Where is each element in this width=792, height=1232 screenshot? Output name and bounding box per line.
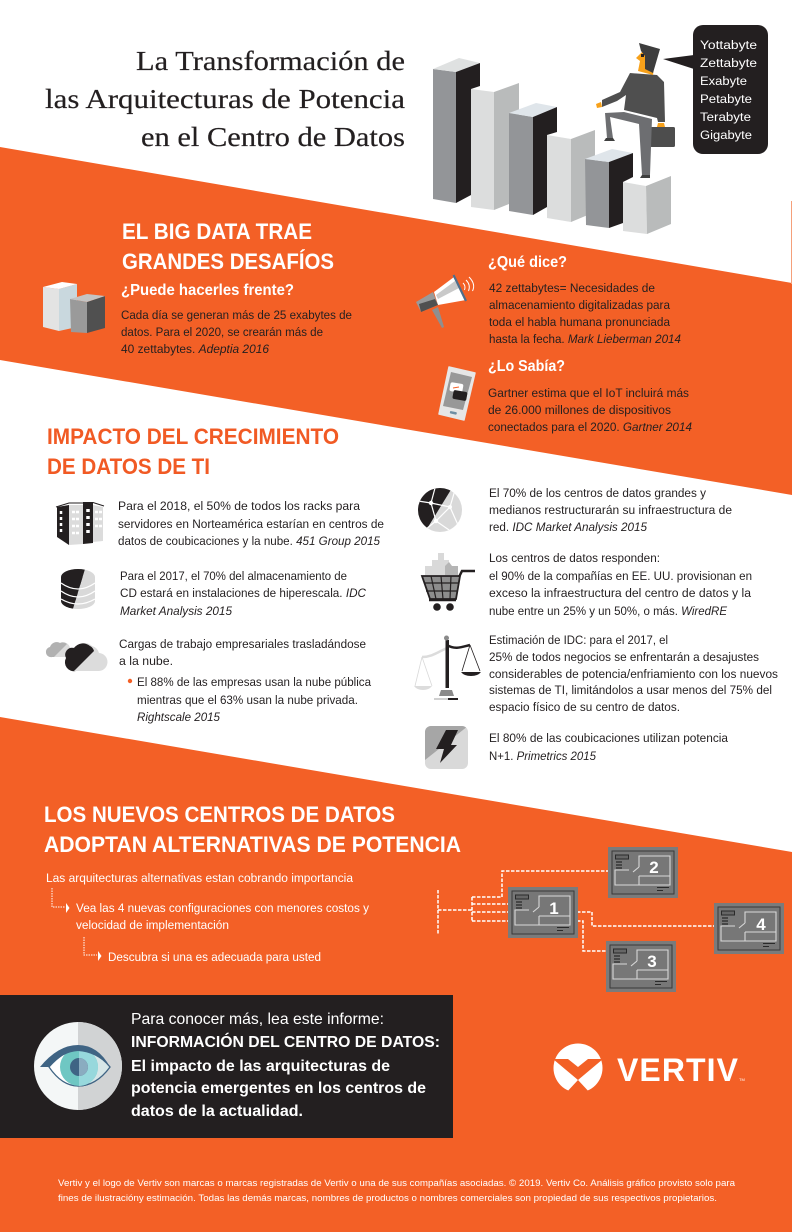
text block: que dice: almacenamiento digitalizadas para [489,298,670,312]
text block: responden: exceso la infraestructura del centro de datos y la [489,586,751,600]
icon: eye [34,1022,122,1110]
text block: almacenamiento: Market Analysis 2015 [120,604,232,618]
text block: potencia n+1: El 80% de las coubicaciones utilizan potencia [489,731,728,745]
text block: responden: Los centros de datos responden: [489,551,660,565]
text block: que dice [488,254,681,346]
speech bubble: data units: Gigabyte [700,128,752,142]
footer legal text: Vertiv y el logo de Vertiv son marcas o marcas registradas de Vertiv o una de sus compañías asociadas. © 2019. Vertiv Co. Análisis gráfico provisto solo para [58,1178,735,1188]
text block: nube: El 88% de las empresas usan la nube pública [137,675,371,689]
text block: puede hacerles frente: ¿Puede hacerles frente? [121,282,294,299]
text block: infraestructura de red: red. IDC Market Analysis 2015 [489,520,647,534]
text block: racks [118,499,384,548]
text block: infraestructura de red: El 70% de los centros de datos grandes y [489,486,707,500]
speech bubble: data units [663,25,768,154]
text block: nube [119,637,371,724]
diagram: floor plan 4: 4 [756,915,766,934]
text block: arquitecturas alternativas: Descubra si una es adecuada para usted [108,950,321,964]
orange edge sliver [791,201,792,284]
text block: lo sabia: conectados para el 2020. Gartner 2014 [488,420,692,434]
text block: almacenamiento [120,569,366,618]
title: las Arquitecturas de Potencia [45,84,405,114]
diagram: floor plan 4 [714,903,784,954]
panel: orange lower section [0,717,792,1232]
text block: potencia n+1 [489,731,728,763]
panel: call to action [0,995,453,1138]
text block: arquitecturas alternativas: velocidad de implementación [76,918,229,932]
text block: estimacion idc: Estimación de IDC: para el 2017, el [489,633,668,647]
illustration: data bars staircase [433,58,671,234]
text block: estimacion idc: sistemas de TI, limitándolos a usar menos del 75% del [489,683,772,697]
text block: informe: Para conocer más, lea este informe: [131,1011,384,1028]
text block: arquitecturas alternativas [46,871,370,964]
heading: impacto [47,424,339,479]
text block: racks: Para el 2018, el 50% de todos los racks para [118,499,360,513]
text block: puede hacerles frente: Cada día se generan más de 25 exabytes de [121,308,352,322]
text block: almacenamiento: Para el 2017, el 70% del almacenamiento de [120,569,347,583]
title: La Transformación de [136,46,405,76]
text block: infraestructura de red: medianos restructurarán su infraestructura de [489,503,732,517]
text block: que dice: ¿Qué dice? [488,254,567,271]
heading: nuevos centros: LOS NUEVOS CENTROS DE DATOS [44,802,395,827]
text block: nube: a la nube. [119,654,173,668]
icon: smartphone [439,367,475,420]
logo: vertiv [553,1044,745,1094]
text block: responden: nube entre un 25% y un 50%, o más. WiredRE [489,604,728,618]
text block: estimacion idc: considerables de potencia/enfriamiento con los nuevos [489,667,778,681]
icon: database [61,569,95,609]
heading: impacto: IMPACTO DEL CRECIMIENTO [47,424,339,449]
text block: puede hacerles frente [121,282,352,356]
diagram: floor plan 1: 1 [549,899,559,918]
text block: arquitecturas alternativas: Vea las 4 nuevas configuraciones con menores costos y [76,901,370,915]
text block: informe: datos de la actualidad. [131,1103,303,1120]
icon: globe [418,488,462,532]
text block: responden [489,551,752,618]
text block: lo sabia: Gartner estima que el IoT incluirá más [488,386,689,400]
speech bubble: data units: Petabyte [700,92,752,106]
text block: responden: el 90% de la compañías en EE. UU. provisionan en [489,569,752,583]
diagram: dashed connections [438,871,714,951]
footer legal text: fines de ilustracióny estimación. Todas las demás marcas, nombres de productos o nombres comerciales son propiedad de sus respectivos propietarios. [58,1193,717,1203]
heading: big data [122,219,334,274]
heading: big data: EL BIG DATA TRAE [122,219,312,244]
text block: racks: servidores en Norteamérica estarían en centros de [118,517,384,531]
icon: shopping cart [422,553,475,611]
icon: megaphone [416,275,474,328]
speech bubble: data units: Exabyte [700,74,747,88]
text block: lo sabia: de 26.000 millones de dispositivos [488,403,671,417]
text block: potencia n+1: N+1. Primetrics 2015 [489,749,596,763]
text block: puede hacerles frente: 40 zettabytes. Adeptia 2016 [121,342,269,356]
text block: que dice: toda el habla humana pronunciada [489,315,670,329]
text block: lo sabia [488,358,692,434]
heading: impacto: DE DATOS DE TI [47,454,210,479]
text block: nube: Rightscale 2015 [137,710,220,724]
logo: vertiv: VERTIV [617,1052,739,1088]
text block: informe: potencia emergentes en los centros de [131,1080,426,1097]
icon: balance scale [414,636,481,700]
logo: vertiv: TM [739,1077,745,1082]
text block: almacenamiento: CD estará en instalaciones de hiperescala. IDC [120,586,366,600]
heading: big data: GRANDES DESAFÍOS [122,249,334,274]
illustration: businessman climbing [596,43,675,178]
speech bubble: data units: Zettabyte [700,56,757,70]
title [45,46,405,152]
text block: racks: datos de coubicaciones y la nube. 451 Group 2015 [118,534,380,548]
icon: clouds [46,642,107,671]
text block: estimacion idc [489,633,778,714]
text block: nube: Cargas de trabajo empresariales trasladándose [119,637,366,651]
icon: storage boxes [43,282,105,333]
diagram: floor plan 3 [606,941,676,992]
panel: orange band big data [0,147,792,495]
text block: informe: INFORMACIÓN DEL CENTRO DE DATOS: [131,1032,440,1051]
text block: lo sabia: ¿Lo Sabía? [488,358,565,375]
text block: estimacion idc: 25% de todos negocios se enfrentarán a desajustes [489,650,759,664]
speech bubble: data units: Yottabyte [700,38,757,52]
speech bubble: data units: Terabyte [700,110,751,124]
diagram: floor plan 1 [508,887,578,938]
diagram: floor plan 3: 3 [647,952,657,971]
text block: que dice: hasta la fecha. Mark Lieberman 2014 [489,332,681,346]
text block: informe [131,1011,440,1120]
title: en el Centro de Datos [141,122,405,152]
footer legal text [58,1178,735,1203]
text block: que dice: 42 zettabytes= Necesidades de [489,281,655,295]
text block: puede hacerles frente: datos. Para el 2020, se crearán más de [121,325,323,339]
heading: nuevos centros [44,802,461,857]
icon: buildings [56,502,104,545]
text block: nube: mientras que el 63% usan la nube privada. [137,693,358,707]
diagram: floor plan 2: 2 [649,858,659,877]
icon: lightning bolt [425,726,468,769]
text block: estimacion idc: espacio físico de su centro de datos. [489,700,680,714]
text block: informe: El impacto de las arquitecturas de [131,1058,390,1075]
diagram: floor plan 2 [608,847,678,898]
text block: infraestructura de red [489,486,732,534]
text block: arquitecturas alternativas: Las arquitecturas alternativas estan cobrando importancia [46,871,353,885]
heading: nuevos centros: ADOPTAN ALTERNATIVAS DE POTENCIA [44,832,461,857]
